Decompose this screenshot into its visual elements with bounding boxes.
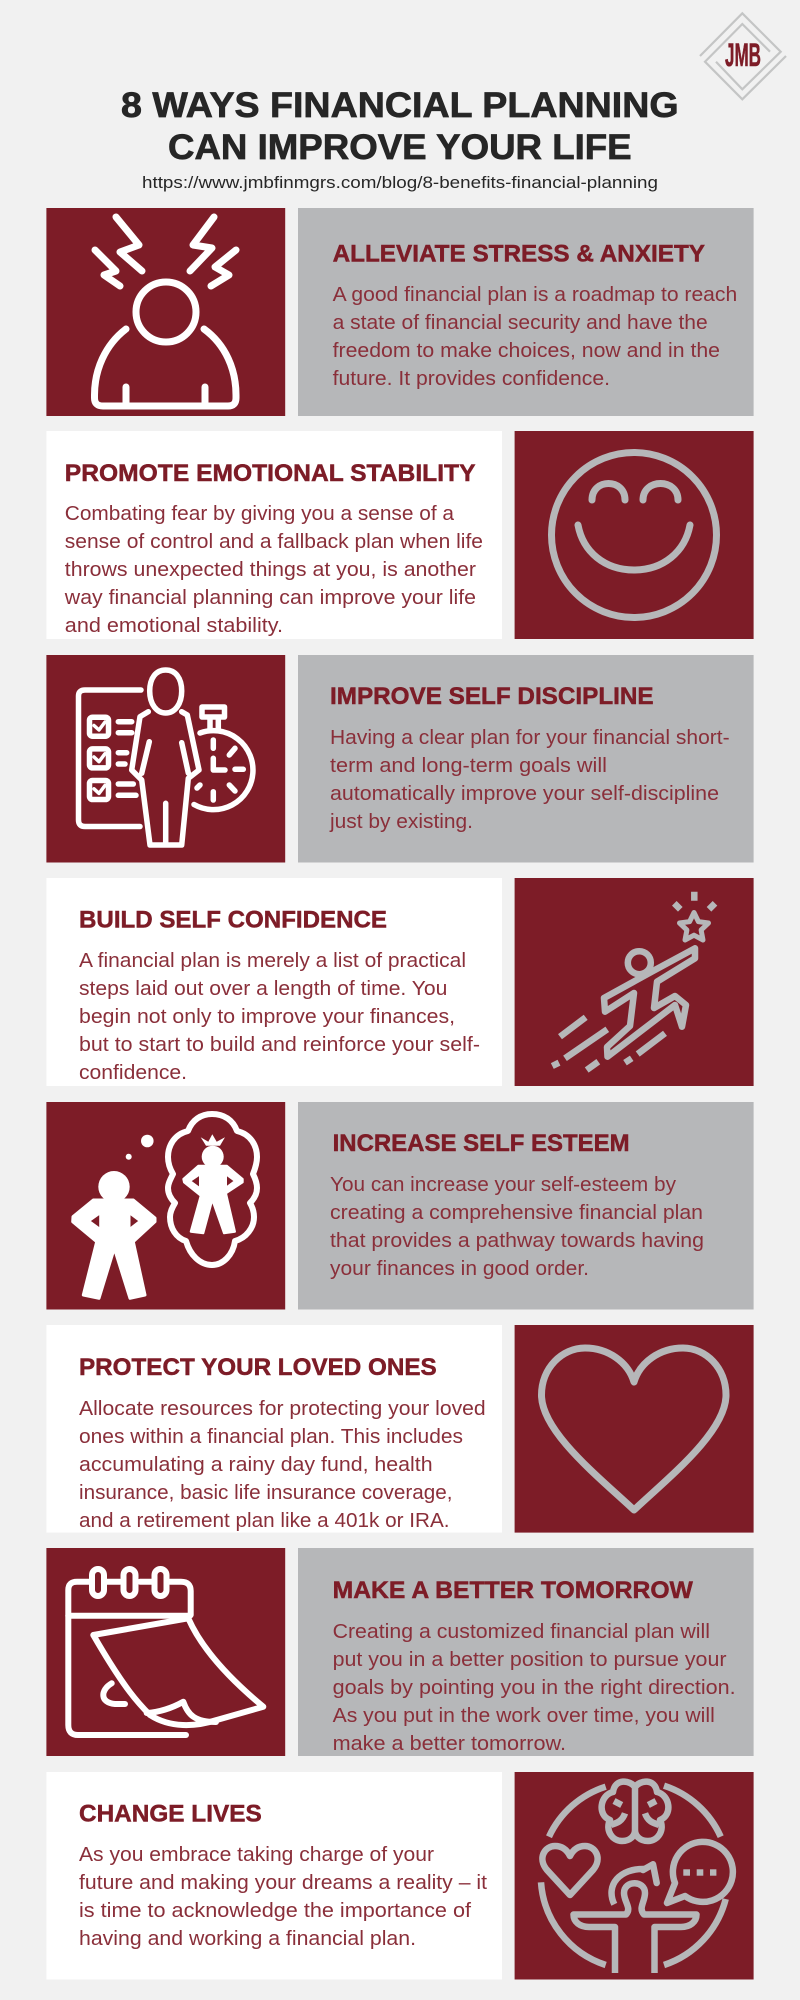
body text: A good financial plan is a roadmap to reach [333,284,737,306]
title [121,86,679,167]
body text [329,727,730,833]
panel: promote emotional stability [46,431,754,639]
body text: sense of control and a fallback plan when life [65,531,483,553]
title: CAN IMPROVE YOUR LIFE [168,128,632,167]
panel: improve self discipline [46,655,754,862]
body text: way financial planning can improve your life [64,587,476,609]
body text: As you embrace taking charge of your [79,1844,434,1866]
panel: build self confidence [46,878,754,1086]
body text: make a better tomorrow. [333,1733,566,1755]
body text [333,284,737,390]
icon: person imagining crowned self [73,1114,257,1298]
body text: Combating fear by giving you a sense of a [65,503,455,525]
body text: begin not only to improve your finances, [79,1006,455,1028]
body text: ones within a financial plan. This includes [79,1426,463,1448]
body text: future. It provides confidence. [333,368,610,390]
title: 8 WAYS FINANCIAL PLANNING [121,86,679,125]
panel: change lives [46,1772,754,1980]
icon: heart outline [542,1348,726,1510]
body text: steps laid out over a length of time. You [79,978,447,1000]
body text: future and making your dreams a reality – it [79,1872,487,1894]
body text: automatically improve your self-discipline [330,783,719,805]
body text: confidence. [79,1062,187,1084]
body text: You can increase your self-esteem by [330,1174,676,1196]
body text: a state of financial security and have the [333,312,708,334]
source url: https://www.jmbfinmgrs.com/blog/8-benefits-financial-planning [142,174,658,192]
body text: put you in a better position to pursue your [333,1649,727,1671]
heading: CHANGE LIVES [79,1800,262,1827]
body text: that provides a pathway towards having [330,1230,704,1252]
body text: As you put in the work over time, you will [333,1705,715,1727]
logo: JMB diamond [700,13,786,99]
body text [79,1398,486,1532]
icon: smiley face [552,452,716,618]
body text [330,1174,704,1280]
body text: is time to acknowledge the importance of [79,1900,471,1922]
body text: and emotional stability. [65,615,283,637]
icon: person with brain, heart and speech bubble [541,1782,733,1973]
logo: JMB diamond: JMB [725,37,761,73]
body text [333,1621,736,1755]
icon: calendar with turning page [68,1569,263,1735]
body text: and a retirement plan like a 401k or IRA. [79,1510,450,1532]
body text: goals by pointing you in the right direction. [333,1677,736,1699]
body text [64,503,483,637]
body text [79,1844,487,1950]
body text: A financial plan is merely a list of practical [79,950,466,972]
body text: Having a clear plan for your financial short- [330,727,730,749]
body text: freedom to make choices, now and in the [333,340,720,362]
body text [79,950,480,1084]
heading: PROMOTE EMOTIONAL STABILITY [65,460,476,487]
body text: Creating a customized financial plan will [333,1621,710,1643]
body text: throws unexpected things at you, is another [65,559,476,581]
body text: insurance, basic life insurance coverage, [79,1482,452,1504]
icon: flying person reaching for star [552,892,715,1070]
body text: but to start to build and reinforce your self- [79,1034,480,1056]
panel: alleviate stress and anxiety [46,208,754,416]
panel: increase self esteem [46,1102,754,1310]
body text: just by existing. [329,811,473,833]
heading: IMPROVE SELF DISCIPLINE [330,683,654,710]
body text: your finances in good order. [330,1258,589,1280]
heading: PROTECT YOUR LOVED ONES [79,1354,437,1381]
body text: having and working a financial plan. [79,1928,416,1950]
body text: Allocate resources for protecting your loved [79,1398,486,1420]
panel: protect your loved ones [46,1325,754,1533]
icon: person with checklist and stopwatch [78,670,253,845]
body text: creating a comprehensive financial plan [330,1202,703,1224]
heading: ALLEVIATE STRESS & ANXIETY [333,241,705,268]
heading: INCREASE SELF ESTEEM [333,1130,630,1157]
panel: make a better tomorrow [46,1548,754,1756]
heading: BUILD SELF CONFIDENCE [79,907,387,934]
body text: accumulating a rainy day fund, health [79,1454,433,1476]
heading: MAKE A BETTER TOMORROW [333,1577,693,1604]
body text: term and long-term goals will [330,755,607,777]
icon: stressed person with lightning bolts [94,217,236,406]
